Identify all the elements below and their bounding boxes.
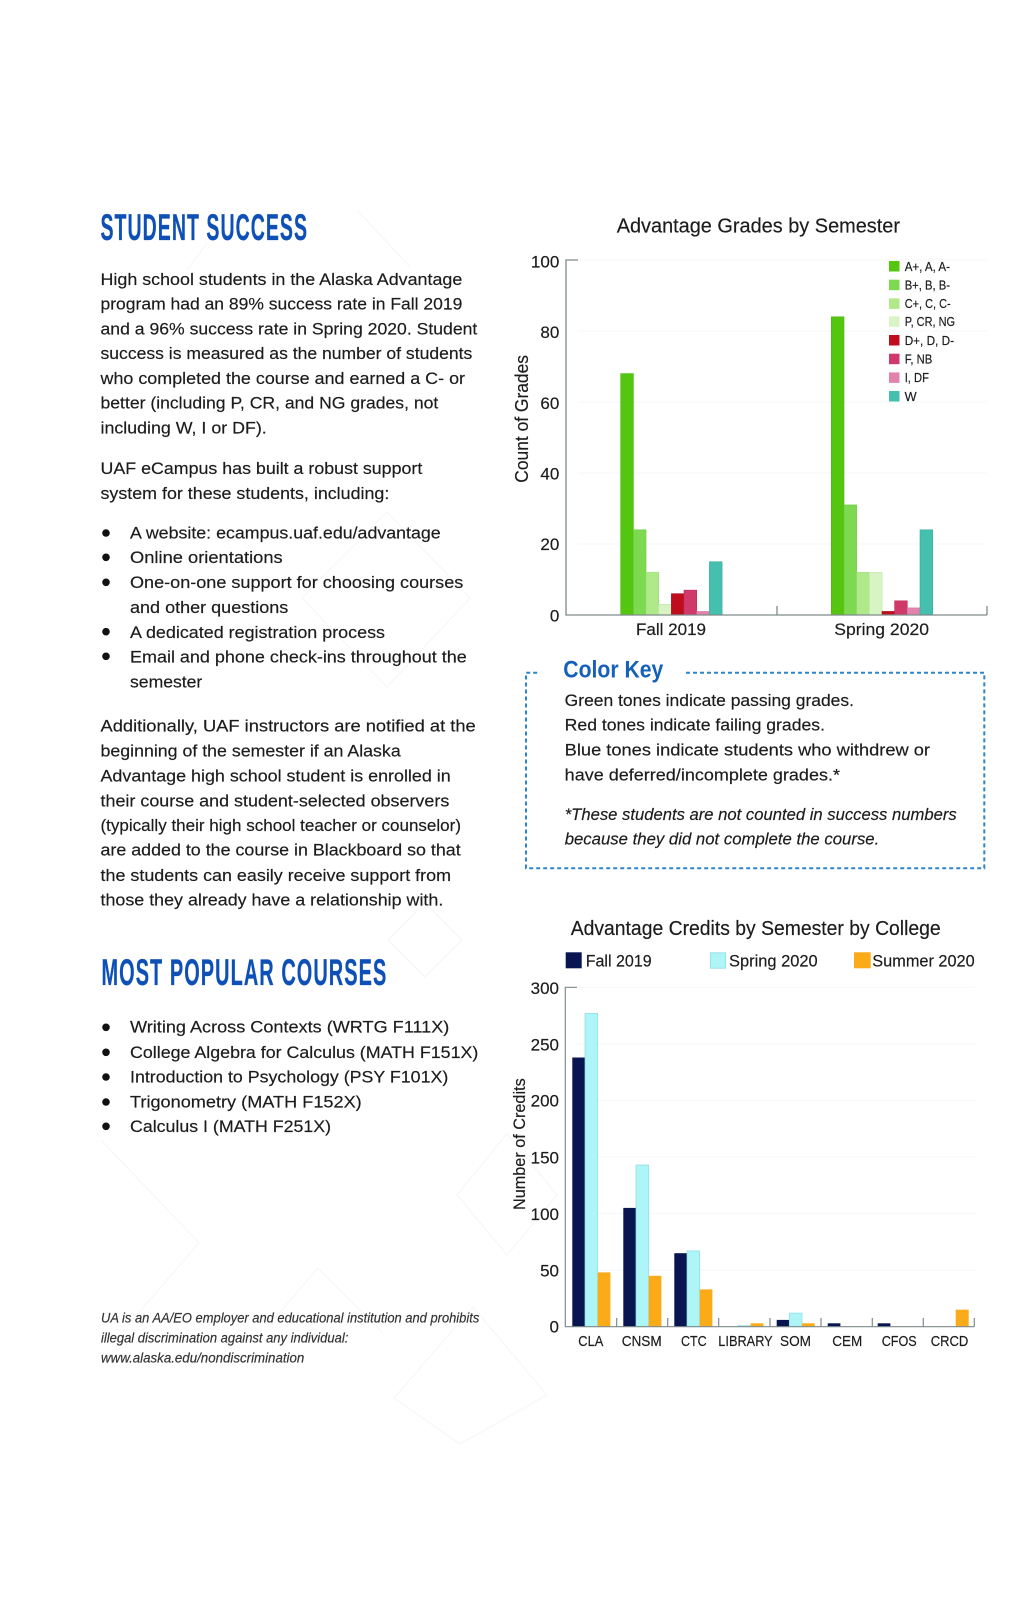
y axis labels [531,253,559,626]
text block: instructor notification: Additionally, UAF instructors are notified at the [100,717,476,736]
color key explanation: Green tones indicate passing grades. [565,691,854,710]
x axis labels: CRCD [931,1333,968,1350]
y axis labels [531,979,559,1337]
y axis title: Count of Grades [512,355,532,483]
heading: most popular courses: MOST POPULAR COURSES [102,952,387,993]
y axis labels: 50 [540,1262,559,1281]
bars: spring 2020 [831,317,933,615]
color key explanation [565,691,930,785]
text block: success rate intro: High school students in the Alaska Advantage [100,270,462,289]
y axis labels: 200 [531,1092,559,1111]
x axis labels: CFOS [882,1333,917,1350]
footer: nondiscrimination statement: UA is an AA/EO employer and educational institution and prohibits [101,1311,480,1326]
axes [566,260,987,615]
y axis title: Number of Credits [511,1078,529,1210]
color key footnote [565,805,957,848]
x axis labels: CNSM [622,1333,662,1350]
y axis labels: 60 [540,394,559,413]
x axis labels: LIBRARY [718,1333,773,1350]
bullet list: popular courses: Introduction to Psychology (PSY F101X) [130,1068,448,1087]
y axis labels: 40 [540,464,559,483]
legend: grades: I, DF [905,371,929,385]
legend: grades: D+, D, D- [905,334,954,348]
y axis labels: 100 [531,1205,559,1224]
text block: instructor notification: those they already have a relationship with. [100,891,443,910]
y axis labels: 20 [540,535,559,554]
text block: support system intro: system for these students, including: [100,484,389,503]
chart: advantage grades by semester [512,215,987,639]
text block: instructor notification: their course and student-selected observers [100,791,449,810]
text block: success rate intro: who completed the course and earned a C- or [99,369,465,388]
y axis labels: 80 [540,323,559,342]
text block: instructor notification: Advantage high school student is enrolled in [100,766,451,785]
legend: semesters [566,952,975,971]
bullet list: support services: One-on-one support for choosing courses [130,573,463,592]
y axis labels: 0 [550,607,559,626]
bullet list: support services: A website: ecampus.uaf.edu/advantage [130,523,441,542]
bullet list: popular courses: Calculus I (MATH F251X) [130,1117,331,1136]
y axis labels: 100 [531,253,559,272]
text block: success rate intro: and a 96% success rate in Spring 2020. Student [100,320,478,338]
dashed border [526,673,984,868]
x axis labels: CLA [578,1333,603,1350]
color key explanation: have deferred/incomplete grades.* [565,766,840,785]
text block: success rate intro: including W, I or DF). [100,418,267,438]
footer: nondiscrimination statement: illegal discrimination against any individual: [101,1331,349,1346]
text block: success rate intro: program had an 89% success rate in Fall 2019 [100,295,462,314]
chart title: Advantage Credits by Semester by College [571,918,941,940]
x axis labels [578,1333,968,1350]
text block: support system intro: UAF eCampus has built a robust support [100,459,423,478]
text block: success rate intro: better (including P, CR, and NG grades, not [100,394,439,413]
bars: spring 2020 [585,1013,802,1327]
footer: nondiscrimination statement: www.alaska.edu/nondiscrimination [101,1350,304,1365]
color key footnote: because they did not complete the course. [565,829,879,848]
x axis labels: Spring 2020 [834,620,929,639]
legend: grades: W [905,390,917,404]
chart title: Advantage Grades by Semester [617,215,900,237]
bullet list: popular courses: Trigonometry (MATH F152X) [130,1092,362,1111]
legend: grades: A+, A, A- [905,260,950,274]
text block: instructor notification: are added to the course in Blackboard so that [100,841,461,860]
y axis labels: 150 [531,1148,559,1167]
footer: nondiscrimination statement [101,1311,480,1365]
legend: grades: B+, B, B- [905,278,950,292]
bullet list: support services: Email and phone check-ins throughout the [130,647,467,666]
bullet list: popular courses: Writing Across Contexts (WRTG F111X) [130,1018,449,1037]
bullet list: support services: A dedicated registration process [130,623,385,642]
bullet list: support services: semester [130,672,203,691]
bullet list: support services [102,523,467,691]
color key heading: Color Key [563,656,664,683]
x axis labels: Fall 2019 [636,620,706,639]
panel: color key [526,656,984,868]
legend: grades [889,260,955,404]
legend: grades: C+, C, C- [905,297,951,311]
color key footnote: *These students are not counted in success numbers [565,805,957,824]
y axis labels: 250 [531,1036,559,1055]
bullet list: support services: Online orientations [130,548,283,567]
y axis labels: 0 [550,1318,559,1337]
text block: instructor notification: (typically their high school teacher or counselor) [100,816,461,835]
bars: summer 2020 [598,1272,969,1327]
bullet list: popular courses: College Algebra for Calculus (MATH F151X) [130,1043,478,1062]
text block: instructor notification: the students can easily receive support from [100,866,451,885]
axes [565,987,974,1327]
text block: instructor notification: beginning of the semester if an Alaska [100,742,401,761]
bars: fall 2019 [572,1058,890,1327]
x axis labels: CEM [832,1333,862,1350]
legend: semesters: Fall 2019 [586,953,652,971]
legend: semesters: Summer 2020 [872,953,975,971]
legend: grades: F, NB [905,352,932,366]
color key explanation: Red tones indicate failing grades. [565,716,825,735]
legend: semesters: Spring 2020 [729,953,818,971]
chart: advantage credits by semester by college [511,918,975,1350]
text block: support system intro [100,459,423,503]
x axis labels [636,620,929,639]
bullet list: support services: and other questions [130,598,288,617]
bars: fall 2019 [621,374,722,615]
x axis labels: SOM [780,1333,811,1350]
color key explanation: Blue tones indicate students who withdrew or [565,741,930,760]
text block: success rate intro [99,270,478,438]
bullet list: popular courses [102,1018,478,1136]
text block: success rate intro: success is measured as the number of students [100,344,472,363]
x axis labels: CTC [681,1333,707,1350]
text block: instructor notification [100,717,476,910]
heading: student success: STUDENT SUCCESS [100,207,308,248]
y axis labels: 300 [531,979,559,998]
legend: grades: P, CR, NG [905,315,955,329]
